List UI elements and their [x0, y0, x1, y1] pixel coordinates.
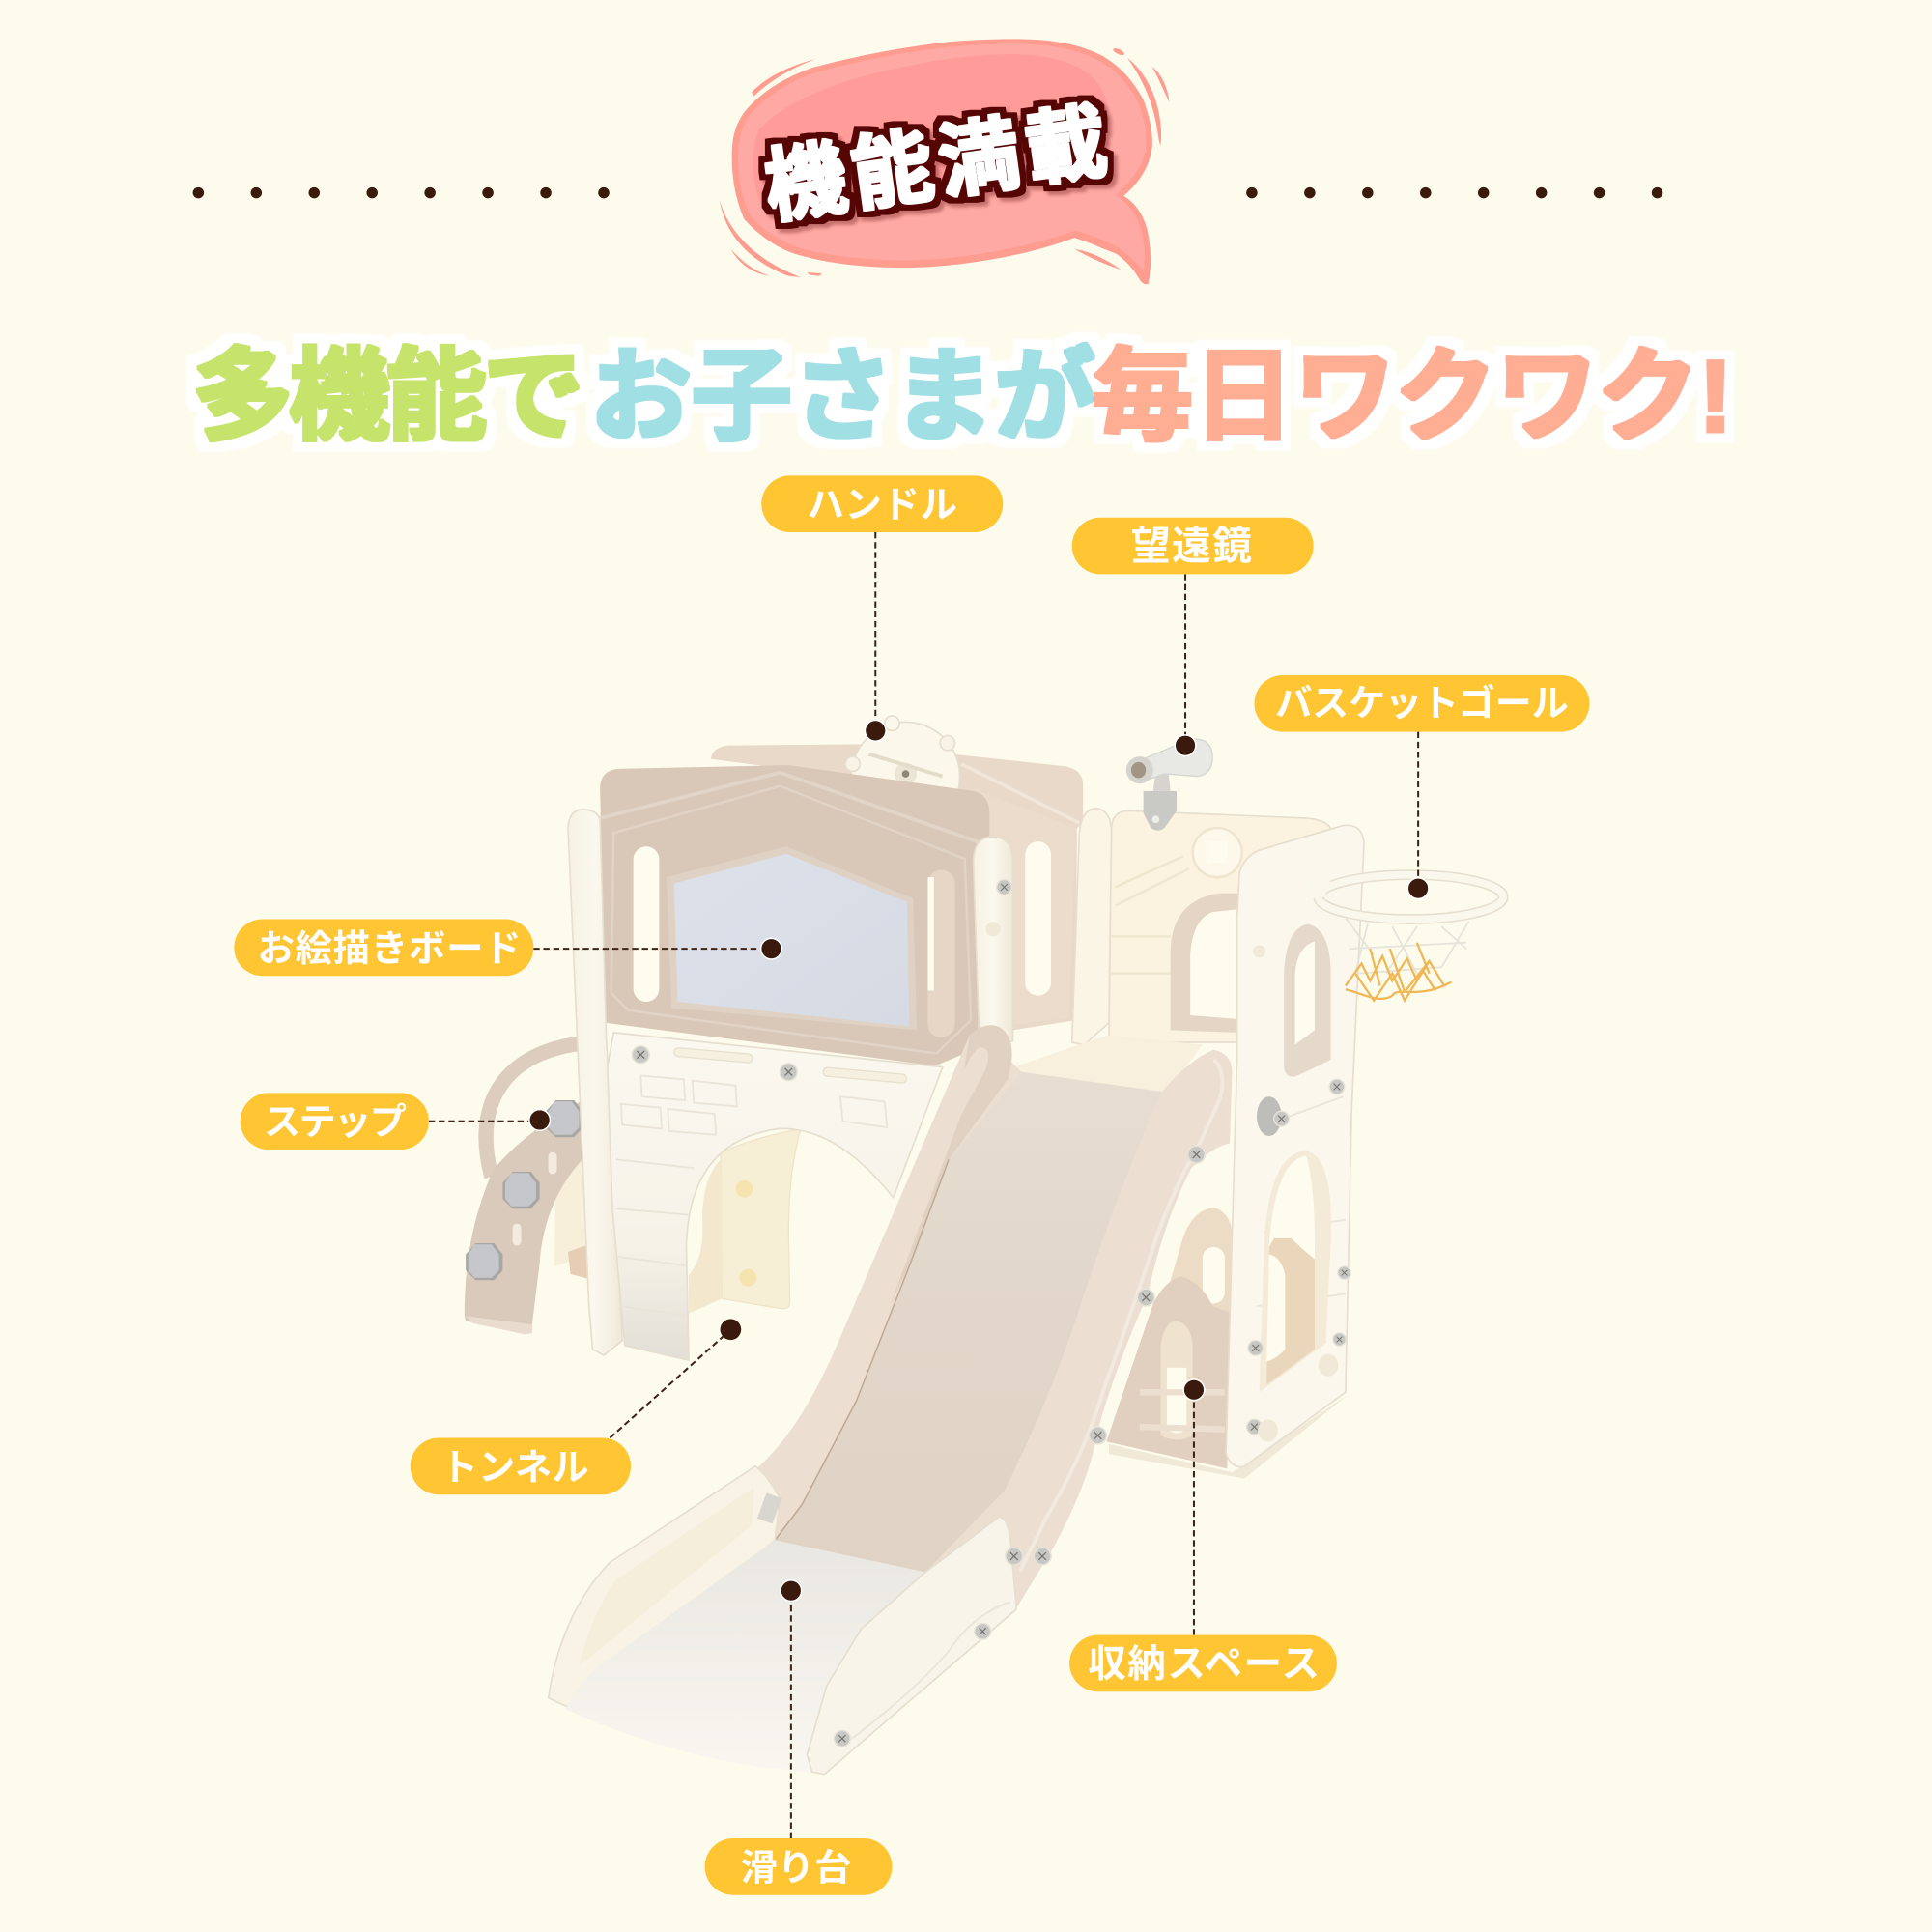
- floor shadow: [1109, 1395, 1348, 1479]
- slide body base: [757, 1025, 1233, 1608]
- tunnel interior panels: [689, 1128, 801, 1314]
- front storage panel: [1106, 1276, 1230, 1468]
- side bolt: [1257, 1096, 1282, 1136]
- bubble fill: [738, 43, 1147, 271]
- tower side wall: [1226, 825, 1364, 1467]
- callout: バスケットゴール: バスケットゴール: [1275, 683, 1569, 724]
- panel slot right: [927, 870, 955, 1037]
- wall bricks: [616, 1076, 887, 1316]
- post beside board: [974, 837, 1012, 1047]
- callout: 収納スペース: [1069, 1379, 1337, 1691]
- basketball hoop: [1300, 867, 1503, 1001]
- step bolts: [546, 1100, 582, 1137]
- side window: [1284, 924, 1331, 1077]
- headline blue part: お子さまが: [590, 340, 1095, 453]
- icon: steering wheel handle: [845, 716, 960, 831]
- headline green part: 多機能で: [192, 340, 584, 453]
- step arc: [465, 1099, 585, 1333]
- headline: [192, 340, 1732, 453]
- callout: お絵描きボード: お絵描きボード: [258, 928, 522, 970]
- slide: [549, 1025, 1233, 1775]
- dotted row right: [1246, 187, 1662, 198]
- tower back panel: [1109, 810, 1331, 1042]
- bubble inner highlight: [753, 54, 1109, 212]
- back panel: [711, 744, 1083, 1030]
- front panel with whiteboard: [600, 765, 989, 1065]
- slide bed: [775, 1072, 1162, 1573]
- telescope mount: [1144, 791, 1177, 831]
- step rungs: [554, 1152, 589, 1266]
- slide right flange: [807, 1517, 1016, 1775]
- callout: バスケットゴール: [1254, 675, 1589, 898]
- platform top: [1014, 1035, 1203, 1096]
- callout: ハンドル: [761, 475, 1003, 741]
- whiteboard: [674, 854, 909, 1026]
- tower back window: [1171, 894, 1239, 1033]
- callout: 望遠鏡: [1072, 518, 1314, 756]
- slide right rail edge: [1020, 1060, 1222, 1571]
- step handle ring: [486, 1043, 579, 1177]
- hoop white net: [1346, 918, 1468, 974]
- callout: 滑り台: 滑り台: [741, 1847, 851, 1889]
- corner post: [1072, 809, 1112, 1045]
- dotted row left: [193, 187, 610, 198]
- slide lower bed: [565, 1540, 925, 1775]
- back storage panel: [1168, 1208, 1233, 1343]
- headline salmon part: 毎日ワクワク!: [1092, 340, 1732, 453]
- product illustration: slide playset: [465, 716, 1503, 1775]
- telescope tube: [1144, 739, 1212, 781]
- side screws: [1329, 1079, 1345, 1094]
- callout: 収納スペース: 収納スペース: [1088, 1643, 1320, 1686]
- callout: 望遠鏡: 望遠鏡: [1131, 524, 1252, 568]
- callout: ステップ: [241, 1093, 551, 1150]
- badge title: 機能満載: [759, 95, 1119, 234]
- left post: [568, 810, 622, 1355]
- callout: トンネル: トンネル: [441, 1447, 589, 1489]
- side arch opening: [1260, 1151, 1331, 1392]
- callout: ステップ: ステップ: [264, 1102, 407, 1144]
- storage panels: [1106, 1208, 1233, 1468]
- callout: お絵描きボード: [234, 920, 781, 976]
- climbing step: [465, 1043, 589, 1334]
- bubble shape: [732, 39, 1152, 284]
- wall screws: [632, 1046, 649, 1064]
- lower front wall with tunnel arch: [608, 1033, 943, 1360]
- hoop ring: [1319, 875, 1503, 920]
- speech bubble badge: [720, 39, 1169, 284]
- callout: トンネル: [411, 1319, 741, 1494]
- panel slot left: [634, 846, 659, 1002]
- callout: ハンドル: ハンドル: [807, 485, 957, 526]
- slide rail screws: [1188, 1146, 1205, 1163]
- slide left rail top: [890, 1025, 1012, 1306]
- slide left flange: [549, 1466, 780, 1707]
- callout: 滑り台: [705, 1580, 892, 1895]
- telescope: [1126, 739, 1212, 831]
- motion strokes: [720, 47, 1169, 277]
- hoop orange net: [1346, 943, 1452, 1001]
